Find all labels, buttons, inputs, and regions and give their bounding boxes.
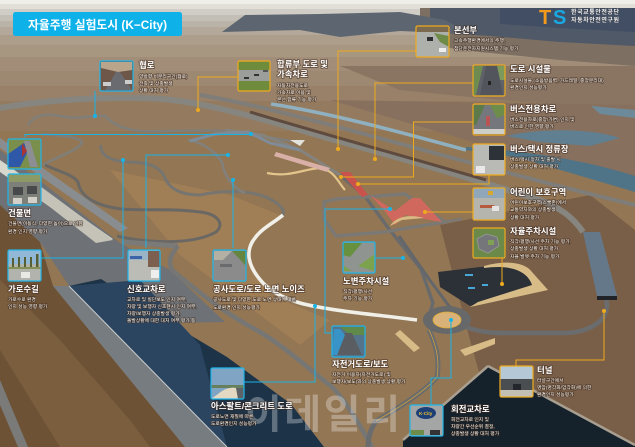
roundabout xyxy=(423,306,471,334)
panel: roundabout: 회전교차로 xyxy=(451,404,490,414)
panel: bus lane: 버스로 인한 영향 평가 xyxy=(510,123,554,130)
panel: asphalt and concrete road xyxy=(211,368,293,427)
panel: signalized intersection xyxy=(127,250,197,324)
logo: TS: 자동차안전연구원 xyxy=(571,16,619,24)
panel: bus and taxi stop: 상충발생 상황 대처 평가 xyxy=(510,163,559,170)
panel: street trees: 가로수로 환경 xyxy=(8,296,36,303)
panel: roundabout: K-City xyxy=(419,411,433,416)
panel: narrow road: 상황 대처 평가 xyxy=(139,87,169,94)
panel: building facade xyxy=(8,139,83,235)
panel: main line xyxy=(416,25,519,57)
navy water band xyxy=(69,279,324,447)
panel: merge road: 자동차전용도로 xyxy=(277,82,308,89)
panel: street trees xyxy=(8,250,48,310)
panel: bike path and sidewalk: 보행자(보도)와의 상충발생 상황 평가 xyxy=(332,378,406,385)
title banner: 자율주행 실험도시 (K−City) xyxy=(28,17,167,32)
panel: automated parking xyxy=(473,226,571,260)
panel: school zone: 교통약자와의 상충발생 xyxy=(510,206,555,213)
panel: merge road xyxy=(238,59,328,103)
panel: bus lane: 버스전용차로(중앙/가변) 인지 및 xyxy=(510,116,575,123)
panel: merge road: 가속차로 이용 및 xyxy=(277,89,311,96)
panel: merge road: 합류부 도로 및 xyxy=(277,59,328,69)
panel: construction road and road surface noise: 공사도로 및 다양한 도로 노면 상태에 따른 xyxy=(213,296,297,303)
panel: school zone: 어린이보호구역(스쿨존)에서 xyxy=(510,199,566,206)
panel: tunnel xyxy=(500,365,592,398)
panel: main line: 고속주행환경에서의 주행, xyxy=(454,37,505,44)
panel: street trees: 인지 성능 영향 평가 xyxy=(8,303,48,310)
connector lines xyxy=(25,51,606,405)
panel: road facilities: 도로시설물 (소음방음벽, 가드레일, 중앙분리대) xyxy=(510,77,604,84)
panel: signalized intersection: 교차로 및 횡단보도 인지 여부, xyxy=(127,296,187,303)
panel: roundabout xyxy=(410,404,500,437)
panel: tunnel: 환경인지 성능평가 xyxy=(537,391,574,398)
panel: roadside parking: 주차 기능 평가 xyxy=(343,295,373,302)
parking area xyxy=(438,265,535,306)
logo: TS: T xyxy=(539,7,551,29)
panel: signalized intersection: 신호교차로 xyxy=(127,284,166,294)
panel: roadside parking xyxy=(343,242,390,302)
panel: bus lane xyxy=(473,104,575,135)
panel: main line: 본선부 xyxy=(454,25,477,35)
panel: narrow road: 전측 및 상충발생 xyxy=(139,80,173,87)
panel: roundabout: 차량간 우선순위 결정, xyxy=(451,423,495,430)
panel: roundabout: 상충발생 상황 대처 평가 xyxy=(451,430,500,437)
facility buildings xyxy=(190,132,300,150)
panel: school zone: 상황 대처 평가 xyxy=(510,214,540,221)
panel: automated parking: 자율주차시설 xyxy=(510,226,557,236)
panel: street trees: 가로수길 xyxy=(8,284,39,294)
panel: construction road and road surface noise: 공사도로/도로 노면 노이즈 xyxy=(213,284,305,294)
panel: construction road and road surface noise xyxy=(213,250,305,311)
panel: tunnel: 터널구간에서 xyxy=(537,377,563,384)
panel: roundabout: 회전교차로 인지 및 xyxy=(451,416,490,423)
panel: building facade: 건물면(이동식, 다양한 높이)으로 인한 xyxy=(8,220,83,227)
panel: road facilities: 환경인지 성능평가 xyxy=(510,84,547,91)
panel: automated parking: 직각/평행/사선 주차 기능 평가, xyxy=(510,238,571,245)
panel: asphalt and concrete road: 도로환경인지 성능평가 xyxy=(211,420,257,427)
panel: roadside parking: 직각/평행/사선 xyxy=(343,288,372,295)
second water body xyxy=(403,366,635,447)
panel: construction road and road surface noise: 도로환경 인지 성능평가 xyxy=(213,304,260,311)
panel: narrow road: 협로 xyxy=(139,60,155,70)
panel: bike path and sidewalk: 자전거 이용자(자전거도로) 및 xyxy=(332,371,391,378)
panel: narrow road: 양방향 비분리구간(협로) xyxy=(139,73,188,80)
test track xyxy=(28,115,607,447)
panel: bike path and sidewalk xyxy=(332,326,406,385)
panel: tunnel: 명암(명각화/암각화)에 의한 xyxy=(537,384,592,391)
highway xyxy=(0,98,583,232)
logo: TS: 한국교통안전공단 xyxy=(571,8,619,16)
red marked zone xyxy=(340,172,368,197)
panel: tunnel: 터널 xyxy=(537,365,553,375)
panel: asphalt and concrete road: 아스팔트/콘크리트 도로 xyxy=(211,401,293,411)
watermark: 이데일리 xyxy=(245,393,400,437)
panel: signalized intersection: 차량 및 보행자 신호현시 인지 여부, xyxy=(127,303,197,310)
panel: building facade: 건물면 xyxy=(8,208,31,218)
logo: TS: S xyxy=(553,7,566,29)
panel: bus and taxi stop xyxy=(473,144,569,175)
water channels xyxy=(271,104,466,150)
logo: TS xyxy=(539,7,619,29)
panel: bike path and sidewalk: 자전거도로/보도 xyxy=(332,359,389,369)
panel: merge road: 가속차로 xyxy=(277,69,308,79)
panel: narrow road xyxy=(100,60,188,94)
panel: bus and taxi stop: 버스/택시 정차 및 출발 시 xyxy=(510,156,561,163)
land patches xyxy=(110,170,330,345)
panel: asphalt and concrete road: 도로노면 재질에 따른 xyxy=(211,413,254,420)
panel: signalized intersection: 돌발상황에 대한 대처 여부 평가 등 xyxy=(127,317,196,324)
tunnel xyxy=(583,232,617,296)
panel: road facilities: 도로 시설물 xyxy=(510,64,551,74)
panel: merge road: 본선 합류 기능 평가 xyxy=(277,96,317,103)
panel: automated parking: 자율 발렛 주차 기능 평가 xyxy=(510,253,560,260)
panel: school zone xyxy=(473,187,566,221)
panel: school zone: 어린이 보호구역 xyxy=(510,187,566,197)
panel: bus lane: 버스전용차로 xyxy=(510,104,557,114)
panel: automated parking: 상충발생 상황 대처 평가 xyxy=(510,245,559,252)
panel: signalized intersection: 차량/보행자 상충발생 평가, xyxy=(127,310,181,317)
panel: building facade: 환경 인지 영향 평가 xyxy=(8,228,48,235)
lower left bank xyxy=(0,205,185,447)
panel: roadside parking: 노변주차시설 xyxy=(343,276,390,286)
runway and lower strips xyxy=(0,150,225,323)
panel: road facilities xyxy=(473,64,604,96)
title banner xyxy=(13,12,182,36)
panel: bus and taxi stop: 버스/택시 정류장 xyxy=(510,144,569,154)
panel: main line: 첨단운전자지원시스템 기능 평가 xyxy=(454,45,519,52)
